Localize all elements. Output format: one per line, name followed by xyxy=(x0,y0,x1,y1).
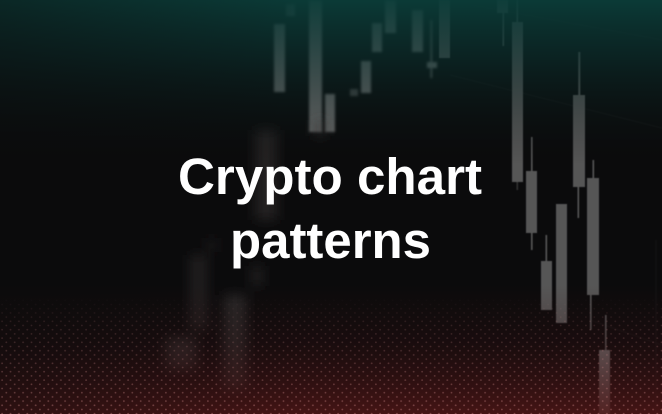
faint grid lines xyxy=(450,5,662,414)
title xyxy=(178,148,482,269)
candlesticks: soft middle group xyxy=(274,0,437,132)
candlesticks: blurred left group xyxy=(166,120,327,390)
teal top glow xyxy=(0,0,662,165)
title: patterns xyxy=(230,212,431,269)
title: Crypto chart xyxy=(178,148,482,205)
candlesticks: sharp right group xyxy=(439,0,610,414)
halftone dot pattern xyxy=(0,296,662,414)
red bottom glow xyxy=(0,285,662,414)
